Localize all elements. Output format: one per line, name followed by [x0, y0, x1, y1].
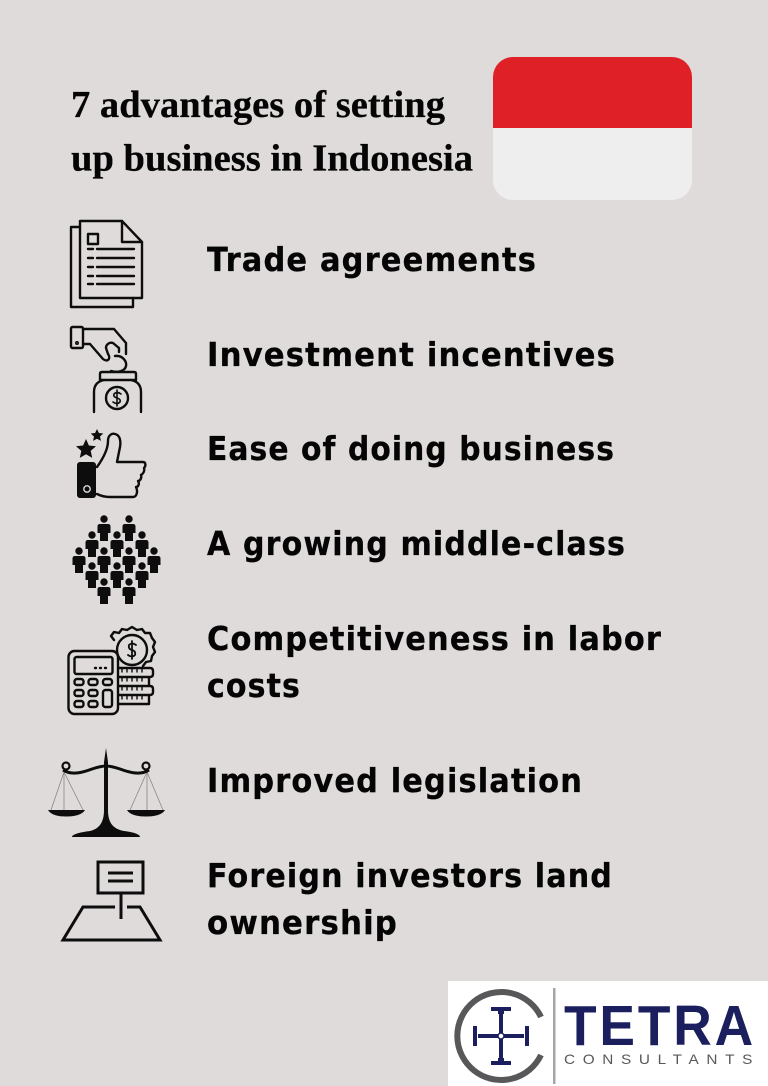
- heading: a growing middle-class: A growing middle-class: [207, 525, 626, 563]
- heading: improved legislation: Improved legislation: [207, 762, 583, 800]
- icon: land plot with sign: [63, 862, 160, 940]
- title: 7 advantages of setting: [71, 84, 445, 126]
- title: up business in Indonesia: [71, 138, 473, 180]
- icon: thumbs up with stars: [76, 429, 145, 498]
- icon: hand dropping coin into jar: [71, 327, 141, 412]
- icon: documents: [71, 221, 142, 307]
- heading: investment incentives: Investment incentives: [207, 336, 616, 374]
- icon: crowd of people: [72, 515, 160, 604]
- logo: Tetra Consultants: CONSULTANTS: [564, 1051, 760, 1067]
- heading: ease of doing business: Ease of doing business: [207, 430, 615, 468]
- heading: foreign investors land ownership: Foreign investors land: [207, 857, 613, 895]
- title: [71, 84, 473, 180]
- heading: competitiveness in labor costs: Competitiveness in labor: [207, 620, 662, 658]
- logo: Tetra Consultants: TETRA: [564, 994, 756, 1058]
- icon: scales of justice: [48, 748, 165, 837]
- logo: Tetra Consultants: [448, 981, 768, 1086]
- heading: trade agreements: Trade agreements: [207, 241, 537, 279]
- heading: foreign investors land ownership: [207, 857, 613, 942]
- heading: competitiveness in labor costs: costs: [207, 667, 301, 705]
- icon: calculator with coins and gear: [68, 627, 155, 714]
- heading: foreign investors land ownership: ownership: [207, 904, 398, 942]
- icon: Indonesian flag: [493, 57, 692, 200]
- heading: competitiveness in labor costs: [207, 620, 662, 705]
